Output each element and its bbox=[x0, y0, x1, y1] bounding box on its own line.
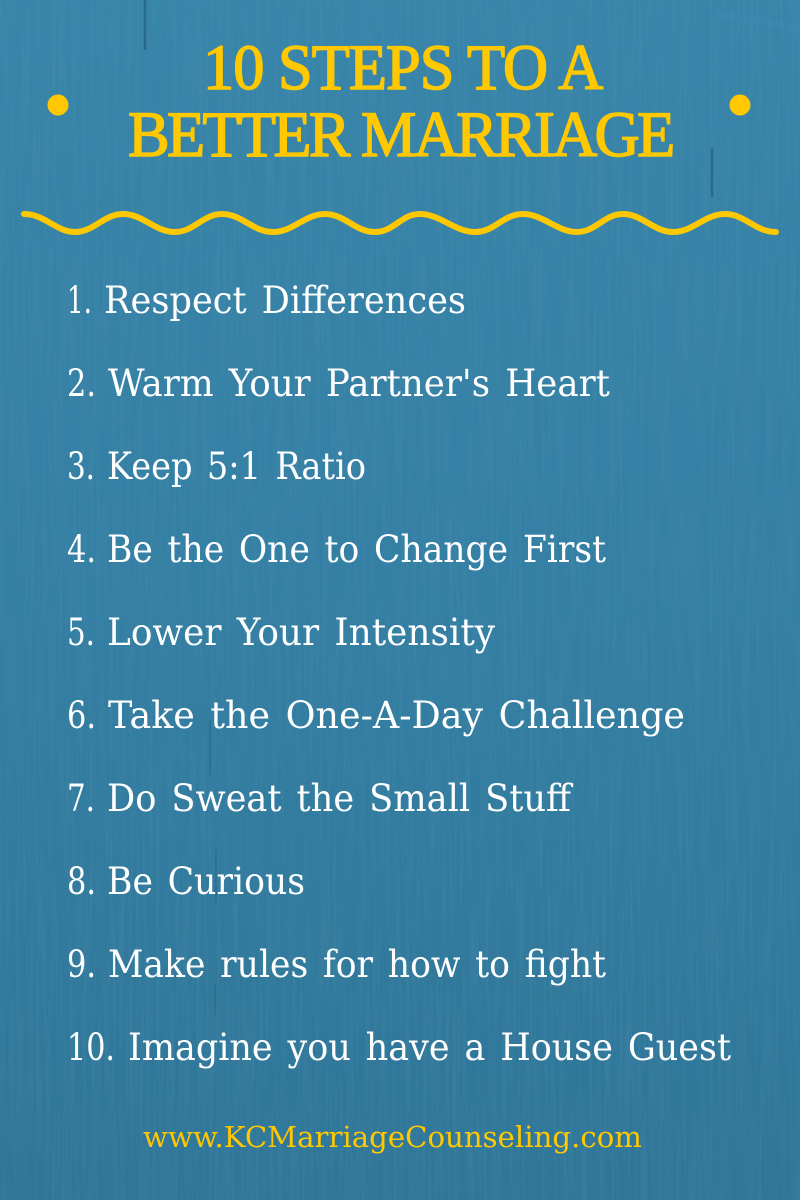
step 6: Take the One-A-Day Challenge bbox=[108, 694, 685, 737]
step 8: 8. bbox=[67, 860, 96, 903]
step 9: Make rules for how to fight bbox=[108, 943, 606, 986]
title: 10 STEPS TO A bbox=[203, 31, 603, 103]
step 2: Warm Your Partner's Heart bbox=[108, 362, 610, 405]
step 1: Respect Differences bbox=[104, 279, 466, 322]
step 6: 6. bbox=[67, 694, 96, 737]
list of ten steps bbox=[67, 279, 731, 1069]
step 10: Imagine you have a House Guest bbox=[128, 1026, 731, 1069]
decorative dot left bbox=[48, 94, 68, 116]
step 2: 2. bbox=[67, 362, 96, 405]
step 8: Be Curious bbox=[107, 860, 305, 903]
step 4: 4. bbox=[67, 528, 96, 571]
title: BETTER MARRIAGE bbox=[128, 98, 675, 170]
wavy divider bbox=[24, 214, 776, 232]
step 9: 9. bbox=[67, 943, 96, 986]
step 1: 1. bbox=[67, 279, 92, 322]
step 3: 3. bbox=[67, 445, 95, 488]
decorative dot right bbox=[730, 94, 750, 116]
footer website: www.KCMarriageCounseling.com bbox=[143, 1120, 642, 1154]
step 7: 7. bbox=[67, 777, 95, 820]
step 3: Keep 5:1 Ratio bbox=[107, 445, 366, 488]
step 5: 5. bbox=[67, 611, 95, 654]
step 4: Be the One to Change First bbox=[107, 528, 606, 571]
title bbox=[128, 31, 675, 170]
step 10: 10. bbox=[67, 1026, 115, 1069]
step 7: Do Sweat the Small Stuff bbox=[107, 777, 574, 820]
step 5: Lower Your Intensity bbox=[107, 611, 495, 654]
